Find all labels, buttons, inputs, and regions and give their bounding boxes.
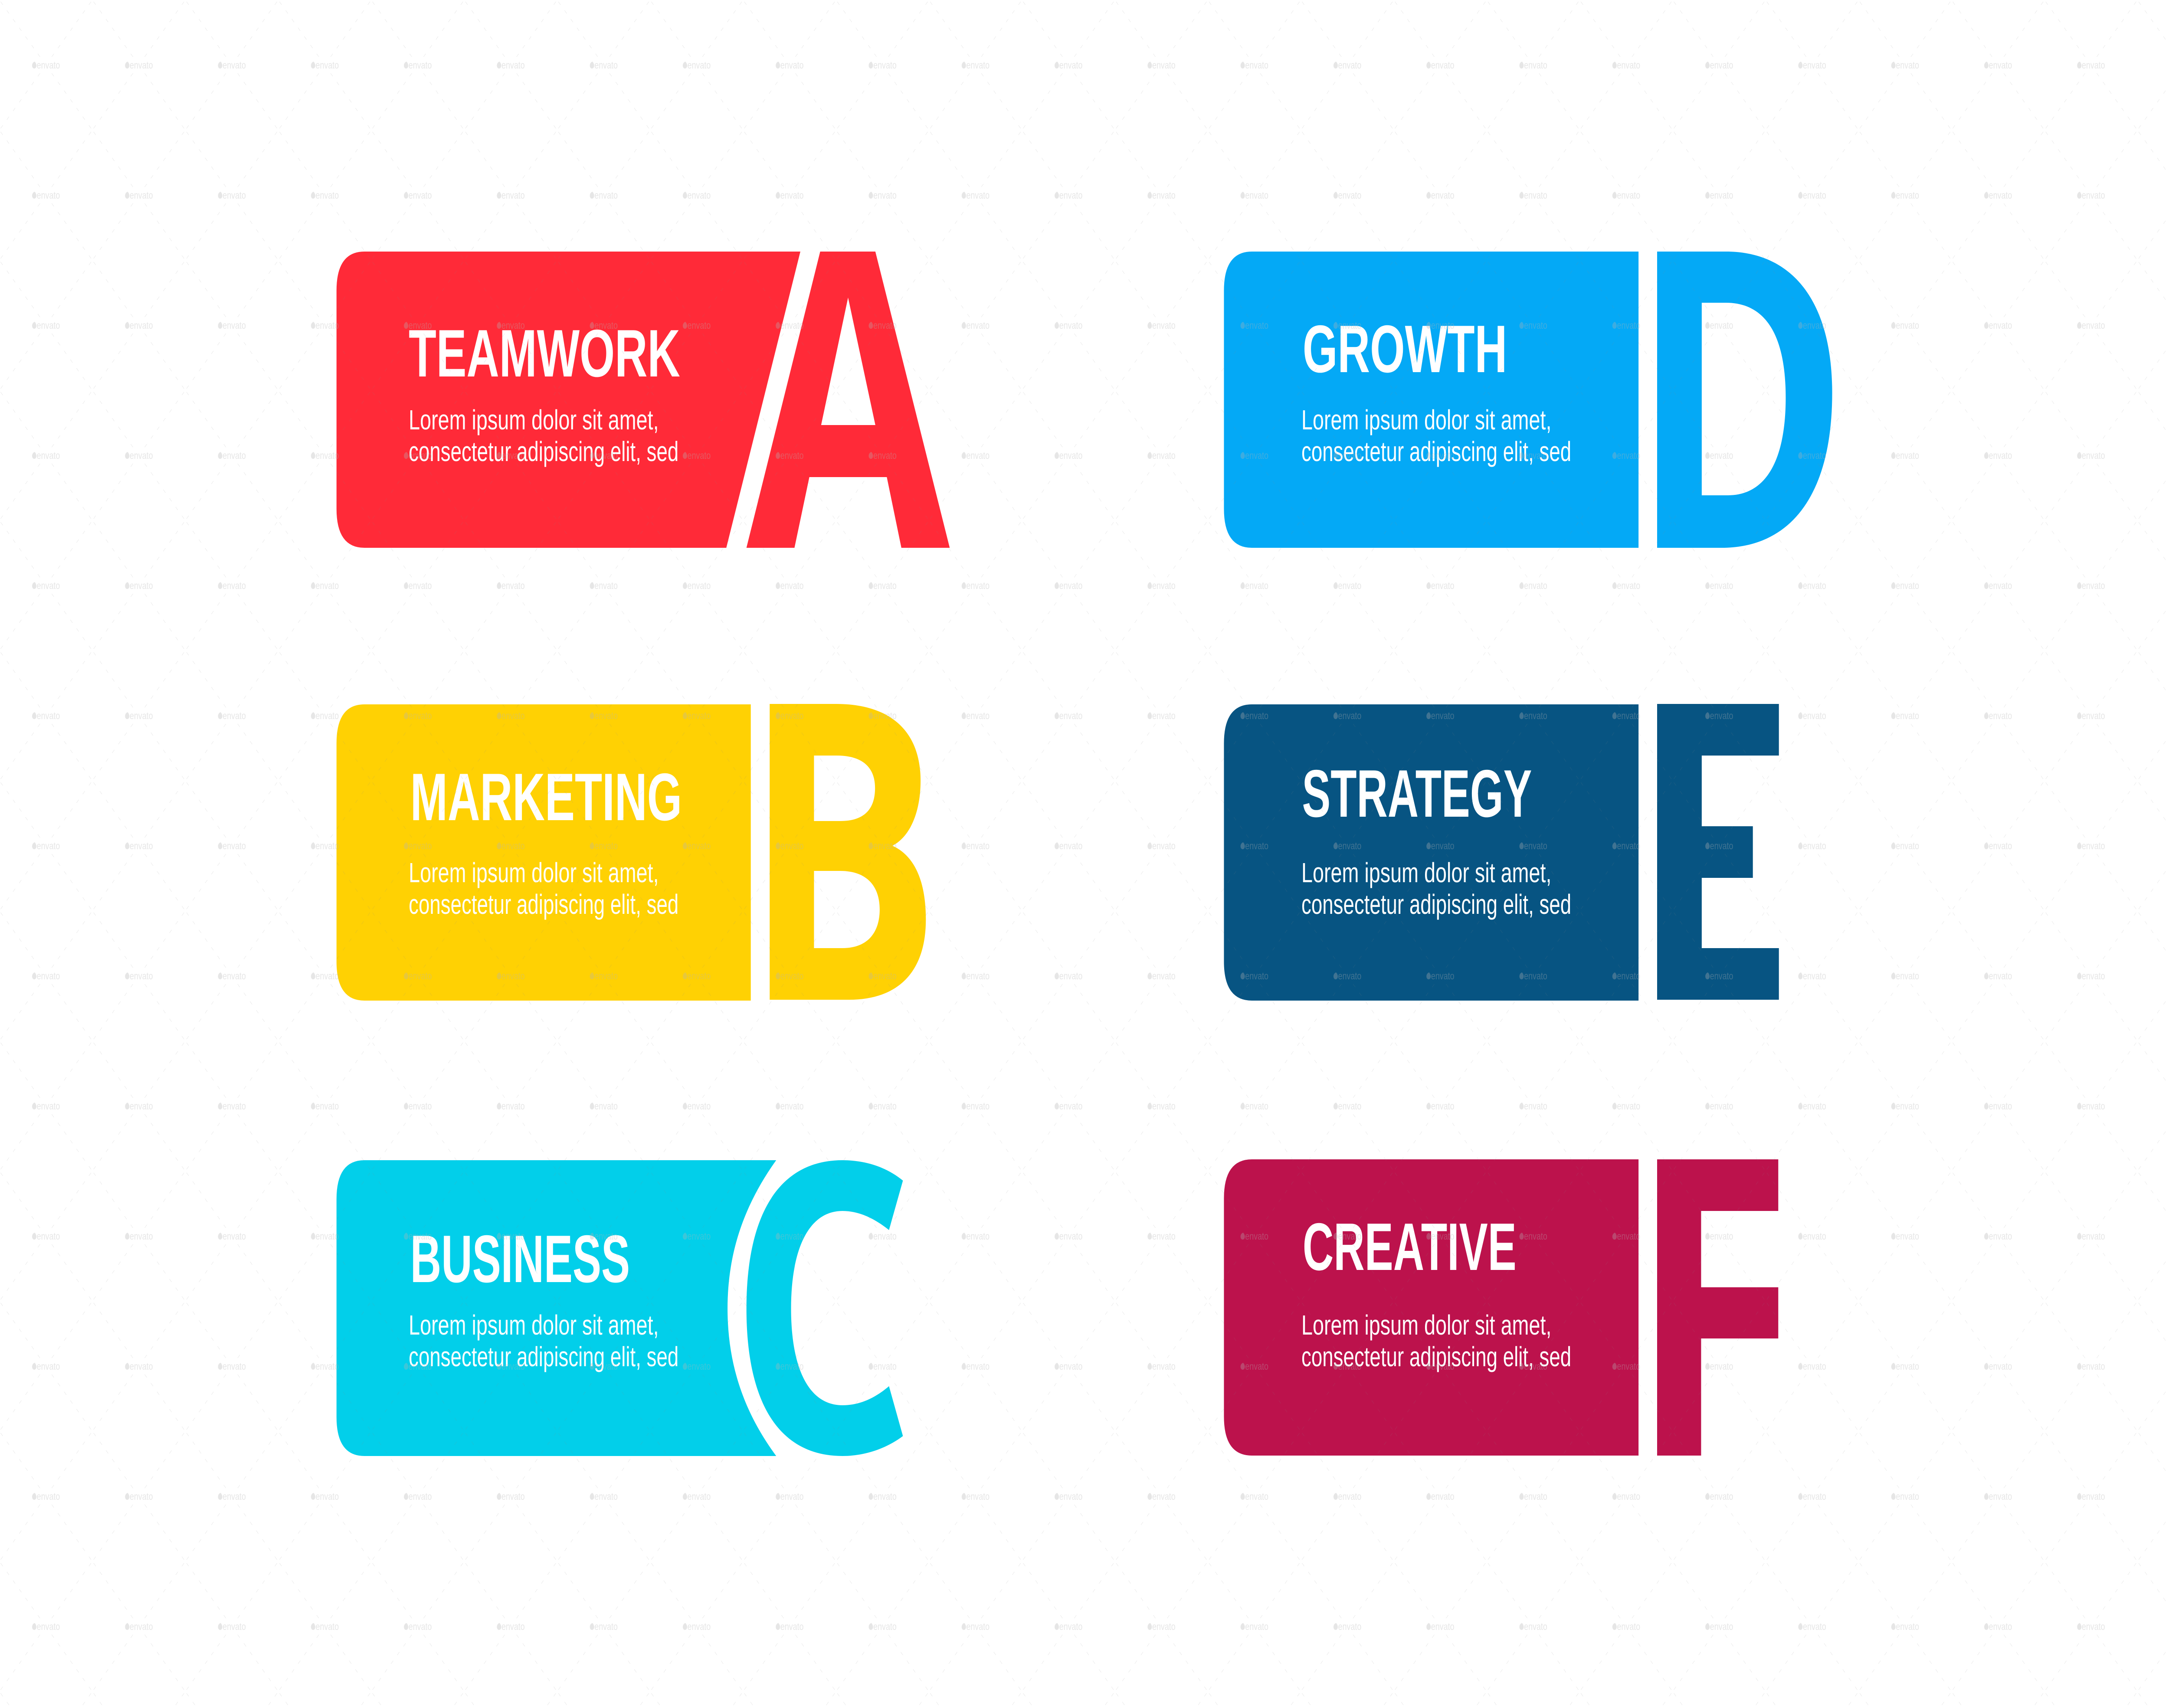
text: growth description: consectetur adipiscing elit, sed xyxy=(1301,436,1571,467)
banner: blue panel xyxy=(1224,252,1638,548)
panel: E strategy xyxy=(1224,704,1779,1001)
heading: GROWTH: GROWTH xyxy=(1303,311,1507,386)
heading: STRATEGY: STRATEGY xyxy=(1302,756,1532,831)
text: marketing description: consectetur adipiscing elit, sed xyxy=(409,889,678,920)
panel: C business xyxy=(337,1160,903,1456)
text: teamwork description: Lorem ipsum dolor sit amet, xyxy=(409,404,659,435)
banner: magenta panel xyxy=(1224,1159,1638,1456)
letter F xyxy=(1657,1159,1778,1456)
heading: BUSINESS: BUSINESS xyxy=(410,1221,630,1296)
text: marketing description: Lorem ipsum dolor sit amet, xyxy=(409,857,659,888)
panel: D growth xyxy=(1224,252,1832,548)
panel: B marketing xyxy=(337,704,926,1001)
text: creative description: consectetur adipiscing elit, sed xyxy=(1301,1341,1571,1372)
banner: red panel xyxy=(337,252,800,548)
text: creative description: Lorem ipsum dolor sit amet, xyxy=(1301,1309,1551,1341)
letter D xyxy=(1657,252,1832,548)
panel: F creative xyxy=(1224,1159,1778,1456)
banner: navy panel xyxy=(1224,704,1638,1001)
heading: TEAMWORK: TEAMWORK xyxy=(409,316,680,391)
text: business description: Lorem ipsum dolor sit amet, xyxy=(409,1309,659,1341)
panel: A teamwork xyxy=(337,252,950,548)
letter A xyxy=(747,252,950,548)
text: business description: consectetur adipiscing elit, sed xyxy=(409,1341,678,1372)
text: growth description: Lorem ipsum dolor sit amet, xyxy=(1301,404,1551,435)
text: strategy description: Lorem ipsum dolor sit amet, xyxy=(1301,857,1551,888)
heading: CREATIVE: CREATIVE xyxy=(1303,1209,1517,1284)
text: teamwork description: consectetur adipiscing elit, sed xyxy=(409,436,678,467)
letter C xyxy=(747,1160,903,1456)
letter B xyxy=(770,704,926,1000)
letter E xyxy=(1657,704,1779,1000)
banner: cyan panel xyxy=(337,1160,776,1456)
text: strategy description: consectetur adipiscing elit, sed xyxy=(1301,889,1571,920)
heading: MARKETING: MARKETING xyxy=(410,759,682,834)
banner: yellow panel xyxy=(337,704,751,1001)
